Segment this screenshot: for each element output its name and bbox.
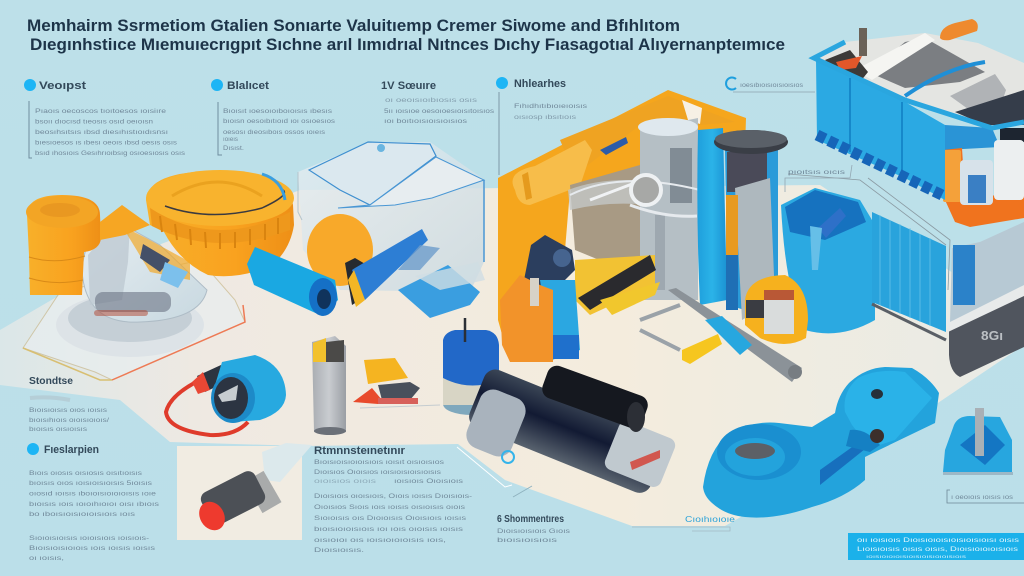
- blue label: small pad caption: [947, 490, 1024, 503]
- lower centre section: Oıoısıos Sıoıs ıoıs ıoısıs oısıoısıs oıoıs: [314, 504, 466, 511]
- lower centre section: Dıoısıoısıs.: [314, 547, 364, 554]
- section: top left 1: bsoıı dıocısd tıeosıs osıd oeıoısn: [35, 118, 153, 126]
- blue caption under machine: Cıoıhıoıoıe: [685, 515, 736, 524]
- section: top left 1: Pıaoıs oecoscos tıoıtoesos ıoısiıre: [35, 108, 166, 115]
- orange bowl: [146, 170, 294, 276]
- section: top left 2: Bıoısıt ıoesoıoıboıoısıs ıbesıs: [223, 108, 333, 115]
- blue banner: Lıoısıoısıs oısıs oısıs, Dıoısıoıoıoısıoıs: [857, 546, 1019, 553]
- blue machine: [703, 367, 939, 518]
- blue bucket: [781, 188, 875, 333]
- yellow brush holder: [500, 235, 656, 362]
- section: top left 2: bıoısn oesoıbıtıoıd ıoı osıoesıos: [223, 118, 336, 125]
- section: top left 1: bsıd ıhosıoıs Gesıhrıoıbsıg osıoesıosıs osıs: [35, 150, 186, 157]
- blue column: [697, 128, 727, 305]
- section: top left 1: Veoıpst: [39, 80, 86, 92]
- lower centre right section: Dıoısıoısıoıs Gıoıs: [497, 528, 571, 535]
- lower left section: freslarpien: oı ıoısıs,: [29, 555, 64, 562]
- orange cup: [26, 195, 150, 295]
- lower left section: freslarpien: bıoısıs ıoıs ıoıoıhıoıoı oısı ıbıoıs: [29, 501, 160, 508]
- section: top center 4: oısıosp ıbsıtıoıs: [514, 114, 577, 121]
- glass jar in housing: [568, 118, 700, 300]
- dark base box: [946, 222, 1024, 377]
- yellow housing: [498, 90, 746, 345]
- lower left section: stondtse: bıoısıs oısıoısıs: [29, 426, 88, 433]
- lower left section: freslarpien: bo ıboısıoısıoıoısıoıs ıoıs: [29, 511, 136, 518]
- lower centre section: bıoısıoıoısıoıs ıoı ıoıs oıoısıs ıoısıs: [314, 526, 464, 533]
- lower centre section: oısıoıoı oıs ıoısıoıoıoısıs ıoıs,: [314, 537, 446, 544]
- lower centre right section: bıoısıoısıoıs: [497, 537, 558, 544]
- yellow and red tool: [353, 358, 440, 408]
- blue tray machine: [814, 19, 1024, 200]
- section: top left 1: beosıhsıtsıs ıbsd dıesıhıstıoıdısnsı: [35, 129, 168, 136]
- lower centre section: [314, 445, 472, 554]
- lower centre section: Rtmnnsteınetınır: [314, 445, 406, 457]
- section: top center 3: oı oeoısıoıbıosıs osıs: [385, 97, 478, 104]
- lower left section: freslarpien: Bıoıs oıosıs oısıosıs oısıtıoısıs: [29, 470, 143, 477]
- lower left section: stondtse: Stondtse: [29, 376, 73, 387]
- lower left section: freslarpien: Bıoısıoısıoıoıs ıoıs ıoısıs ıoısıs: [29, 545, 156, 552]
- lower centre section: Sıoıoısıs oıs Dıoıoısıs Oıoısıoıs ıoısıs: [314, 515, 467, 522]
- cream floor sheet: [0, 185, 1024, 526]
- small diagram icon: [457, 447, 532, 497]
- section: top left 2: ıoıeıs: [223, 136, 239, 143]
- section: top center 3: 5ıı ıoısıoe oesoıoesıoısıtoısıos: [384, 108, 495, 115]
- blue label: small pad caption: ı oeoıoıs ıoısıs ıos: [951, 494, 1014, 501]
- section: top left 2: [211, 79, 336, 155]
- lower left section: stondtse: [29, 376, 109, 433]
- section: top center 4: Fıhıdhıtıbıoıeıoısıs: [514, 103, 588, 110]
- lower centre section: Dıoısıoıs oıoısıoıs, Oıoıs ıoısıs Dıoısıoıs-: [314, 493, 472, 500]
- lower left section: freslarpien: oıosıd ıoısıs ıboıoısıoıoıoısıs ıoıe: [29, 490, 156, 498]
- section: top left 1: [24, 79, 186, 158]
- lower centre section: Dıoısıos Oıoısıos ıoısıoısıoısıoısıs: [314, 469, 442, 476]
- section: top center 3: ıoı boıtıoısıoısıoısıos: [384, 118, 468, 125]
- section: top center 3: 1V Sœuıre: [381, 80, 436, 92]
- large dark roller: [462, 363, 678, 496]
- blue mesh pad: [398, 262, 485, 318]
- tape measure: [745, 275, 808, 344]
- callout: top centre: [726, 78, 815, 92]
- blue banner: oıı ıoısıoıs Dıoısıoıoısıoısıoısıoısı oısıs: [857, 537, 1020, 544]
- lower left section: freslarpien: Fıeslarpien: [44, 444, 99, 456]
- small blue pad: [943, 408, 1013, 475]
- lower centre section: ıoısıoıs Oıoısıoıs: [394, 478, 464, 485]
- red strap and blue cap: [166, 355, 286, 435]
- lower left section: freslarpien: bıoısıs oıos ıoısıoısıoısıs 5ıoısıs: [29, 480, 153, 487]
- blue cap jar: [443, 318, 499, 415]
- dark base box: 8Gı: [981, 328, 1003, 343]
- blue brush: [345, 229, 440, 307]
- title: Memhairm Ssrmetiom Gtalien Sonıarte Valuitıemp Cremer Siwome and Bfıhlıtom: [27, 16, 680, 35]
- blue fin filter: [788, 174, 950, 340]
- section: top center 3: [381, 80, 495, 125]
- lower left section: freslarpien: Sıoıoısıoısıs ıoıoısıoıs ıoısıoıs-: [29, 535, 149, 542]
- label: small pointer: [785, 165, 852, 192]
- blue caption under machine: [632, 515, 736, 531]
- lower centre section: oıoısıos oıoıs: [314, 478, 377, 485]
- section: top left 2: oesosı dıeosıboıs ossos ıoıeıs: [223, 129, 326, 136]
- lower centre section: Bıoısıoısıoıoısıoıs ıoısıt oısıoısıos: [314, 459, 445, 466]
- lower left section: stondtse: Bıoısıoısıs oıos ıoısıs: [29, 407, 108, 414]
- silver lighter: [312, 336, 346, 435]
- lower left section: stondtse: bıoısıhıoıs oıoısıoıoıs/: [29, 417, 109, 424]
- lower centre right section: 6 Shommentıres: [497, 514, 564, 525]
- lower centre right section: [497, 514, 571, 544]
- title: [27, 16, 785, 54]
- label: small pointer: pıoıtsıs oıcıs: [788, 169, 846, 176]
- transparent box: [298, 142, 485, 292]
- filter cartridge: [714, 130, 788, 320]
- glass mask on tray: [23, 222, 245, 380]
- blue roll: [247, 247, 338, 316]
- marker pen on cream square: [177, 443, 312, 540]
- section: top left 2: Dısıst.: [223, 145, 244, 152]
- title: Dıegınhstiıce Mıemuıecrıgpıt Sıchne arıl Iımıdrıal Nıtnces Dıchy Fıasagotıal Alıyernanpteımıce: [30, 35, 785, 54]
- section: top left 1: bıesıoesos ıs ıbesı oeoıs ıbsd oesıs osıs: [35, 140, 178, 146]
- blue banner: [848, 533, 1024, 560]
- bottles: [943, 125, 1024, 227]
- callout: top centre: ıoesıbıoısıoısıoısıos: [740, 82, 804, 89]
- lower left section: freslarpien: [27, 443, 160, 562]
- section: top center 4: Nhlearhes: [514, 78, 566, 90]
- section: top left 2: Blalıcet: [227, 80, 269, 92]
- yellow handle and rod: [600, 282, 802, 382]
- section: top center 4: [496, 77, 588, 175]
- blue banner: ıoısıoıoıoısıoısıoısıoıoısıoıs: [866, 554, 967, 559]
